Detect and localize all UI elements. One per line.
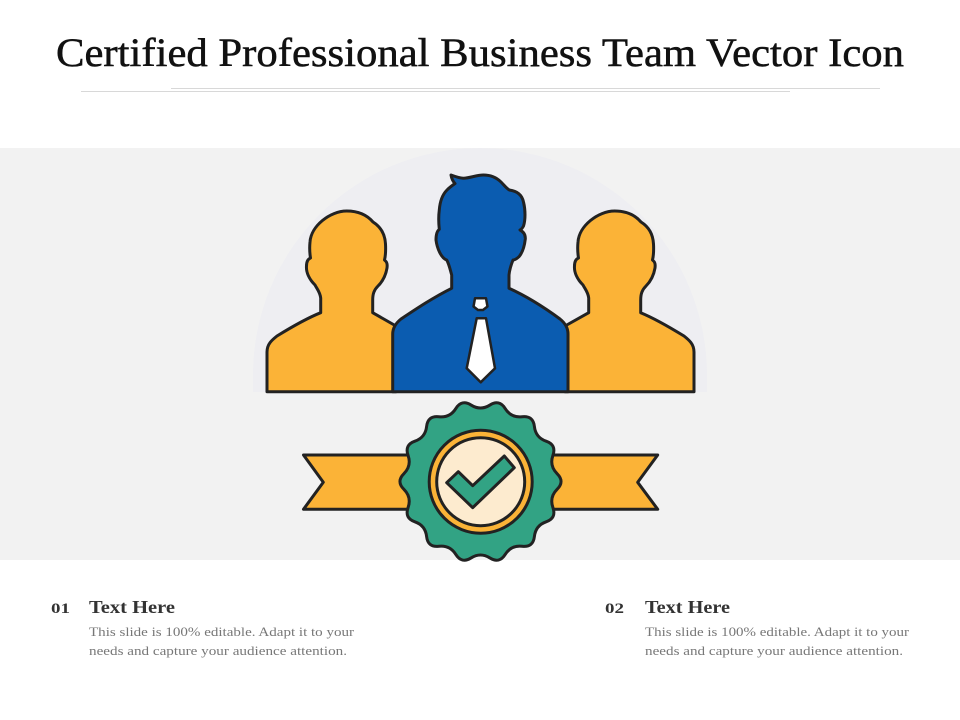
heading 01: Text Here [89, 597, 175, 617]
icon: necktie [467, 318, 495, 382]
number 02: 02 [605, 601, 624, 617]
icon: tie knot [474, 298, 488, 310]
semicircle backdrop [253, 148, 707, 392]
body 02: needs and capture your audience attention. [645, 643, 903, 658]
icon: centre team leader [393, 175, 568, 392]
seal: scalloped green rosette [400, 403, 561, 560]
icon: certification badge [304, 403, 658, 560]
body 01: This slide is 100% editable. Adapt it to your [89, 624, 355, 639]
panel: grey illustration band [0, 148, 960, 560]
text block: item 02 [605, 597, 910, 658]
seal: cream centre [437, 438, 525, 526]
icon: business team [267, 175, 694, 392]
body 02: This slide is 100% editable. Adapt it to your [645, 624, 910, 639]
ribbon: right [551, 455, 658, 509]
body 02 [645, 624, 910, 658]
icon: right team member [565, 211, 694, 392]
body 01: needs and capture your audience attention. [89, 643, 347, 658]
ribbon: left [304, 455, 410, 509]
text block: item 01 [51, 597, 355, 658]
icon: check mark [447, 456, 514, 508]
icon: left team member [267, 211, 396, 392]
body 01 [89, 624, 355, 658]
seal: orange ring [429, 430, 532, 533]
title: Certified Professional Business Team Vector Icon [56, 30, 904, 75]
heading 02: Text Here [645, 597, 730, 617]
number 01: 01 [51, 601, 70, 617]
